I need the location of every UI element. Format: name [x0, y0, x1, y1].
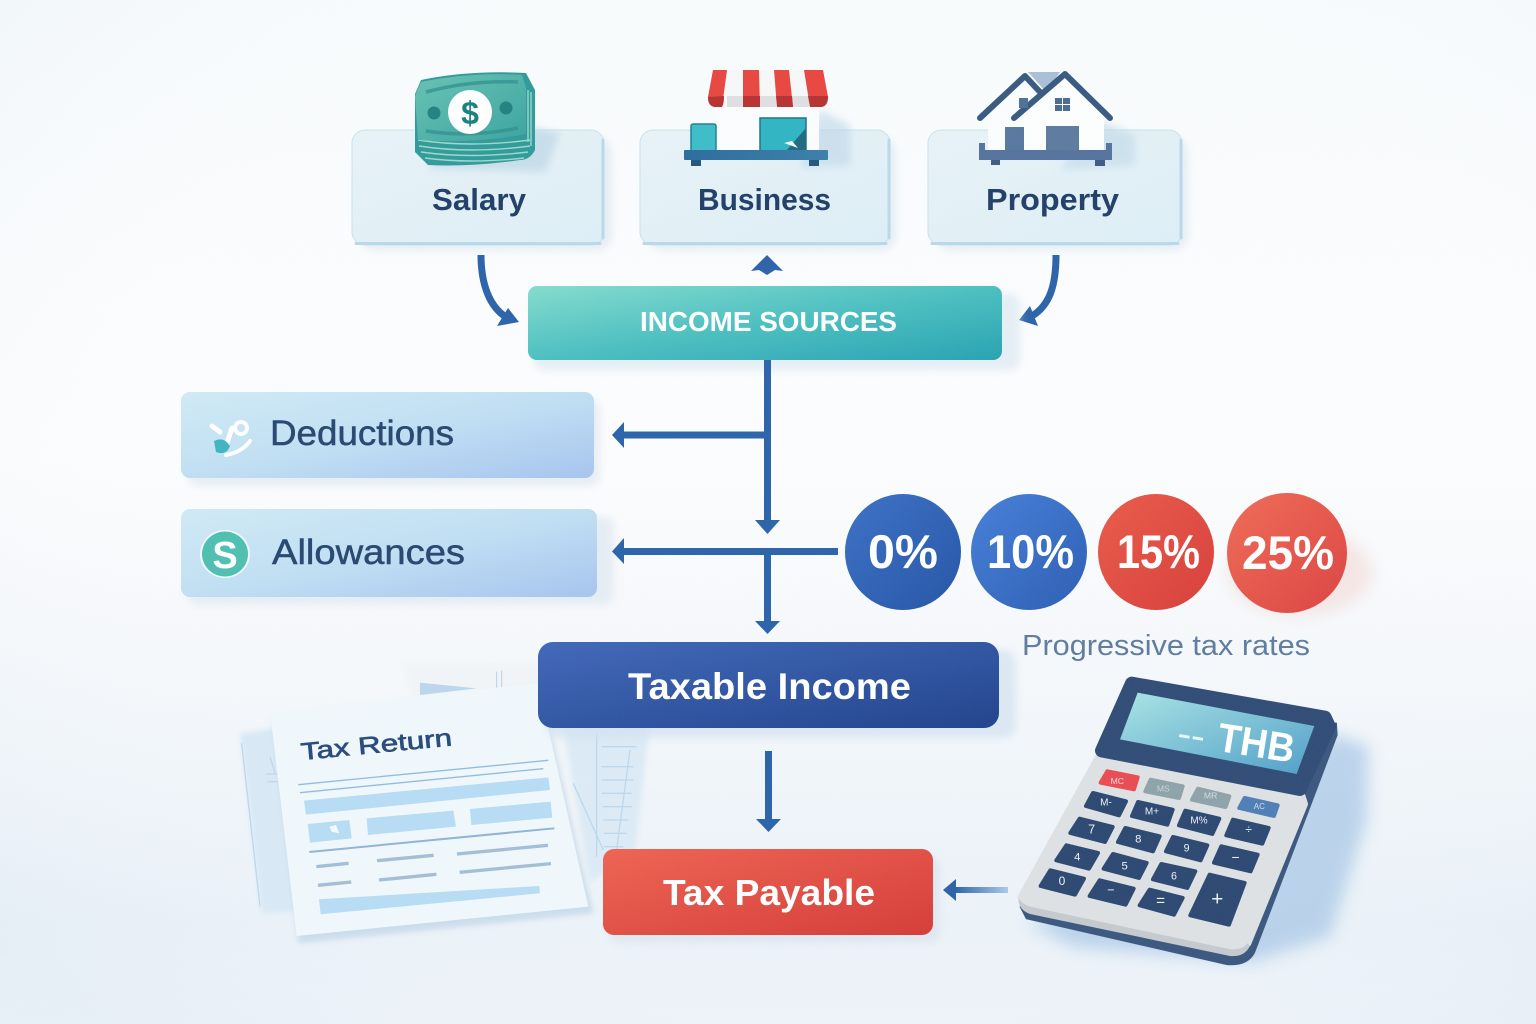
label: property: Property	[986, 182, 1120, 217]
calculator body	[1022, 758, 1304, 952]
panel: salary card	[352, 72, 612, 250]
label: business: Business	[698, 182, 831, 217]
icon: deductions tools	[212, 422, 250, 455]
arrow: to deductions	[612, 422, 766, 448]
screen readout: THB	[1215, 714, 1298, 772]
icon: allowance coin	[200, 530, 250, 578]
illustration: calculator	[1018, 683, 1368, 964]
calculator head	[1102, 683, 1329, 789]
panel: tax payable	[603, 849, 940, 943]
arrow: rates to allowances	[612, 538, 838, 564]
key labels: MC	[1111, 776, 1124, 786]
key labels: M+	[1145, 806, 1159, 817]
keypad	[1041, 771, 1278, 925]
illustration: tax return documents	[240, 663, 650, 943]
arrow: property to income sources	[1019, 255, 1056, 326]
key labels: 6	[1171, 870, 1177, 882]
key labels: −	[1107, 883, 1115, 897]
key labels: +	[1211, 887, 1223, 910]
arrow: salary to income sources	[481, 255, 519, 326]
key labels: M%	[1190, 815, 1208, 826]
arrow: main down to rates junction	[755, 360, 780, 534]
icon: banknote stack	[415, 72, 560, 172]
key labels: M-	[1100, 797, 1112, 808]
label: tax payable: Tax Payable	[663, 872, 875, 913]
label: tax return: Tax Return	[300, 725, 453, 766]
panel: business card	[640, 70, 896, 250]
key labels: MS	[1157, 783, 1170, 793]
key labels: −	[1232, 849, 1240, 865]
key labels: 4	[1074, 852, 1080, 864]
awning	[708, 70, 828, 107]
back documents	[240, 663, 650, 913]
label: allowances: Allowances	[272, 533, 465, 572]
screen	[1120, 693, 1314, 774]
key labels: 0	[1059, 874, 1066, 888]
front page	[270, 683, 588, 936]
label: progressive tax rates: Progressive tax rates	[1022, 630, 1310, 662]
key labels: AC	[1254, 802, 1265, 811]
arrow: to taxable income	[755, 555, 780, 634]
label: taxable income: Taxable Income	[628, 666, 911, 707]
icon: storefront	[684, 70, 850, 168]
panel: property card	[928, 72, 1188, 250]
label: salary: Salary	[432, 182, 527, 217]
screen dashes: --	[1176, 721, 1207, 752]
icon: houses	[979, 72, 1135, 170]
badge: 0 percent: 0%	[868, 525, 938, 578]
label: income sources: INCOME SOURCES	[640, 306, 897, 337]
key labels: 5	[1121, 860, 1128, 872]
panel: deductions	[181, 392, 600, 486]
badge: 25 percent	[1227, 493, 1347, 613]
badge: 0 percent	[845, 494, 961, 610]
badge: 10 percent: 10%	[987, 525, 1074, 578]
icon: banknote stack: $	[461, 95, 479, 131]
key labels	[1059, 776, 1265, 910]
arrow: income sources up to business	[751, 255, 783, 275]
key labels: 9	[1184, 842, 1190, 854]
panel: income sources	[528, 286, 1020, 370]
badge: 25 percent: 25%	[1242, 526, 1334, 579]
arrow: calculator to tax payable	[943, 879, 1008, 901]
key labels: 7	[1088, 822, 1095, 836]
chart: progressive tax rates	[845, 493, 1372, 662]
key labels: 8	[1135, 834, 1141, 846]
badge: 15 percent	[1098, 494, 1214, 610]
icon: allowance coin: S	[212, 535, 238, 577]
arrow: taxable income to tax payable	[756, 751, 781, 832]
key labels: ÷	[1245, 822, 1252, 836]
label: deductions: Deductions	[270, 414, 454, 453]
key labels: MR	[1204, 790, 1217, 800]
badge: 15 percent: 15%	[1117, 525, 1200, 578]
panel: allowances	[181, 509, 614, 605]
shadow	[1027, 733, 1368, 962]
key labels: =	[1156, 892, 1165, 909]
panel: taxable income	[538, 642, 1016, 738]
calculator base	[1021, 723, 1337, 964]
badge: 10 percent	[971, 494, 1087, 610]
